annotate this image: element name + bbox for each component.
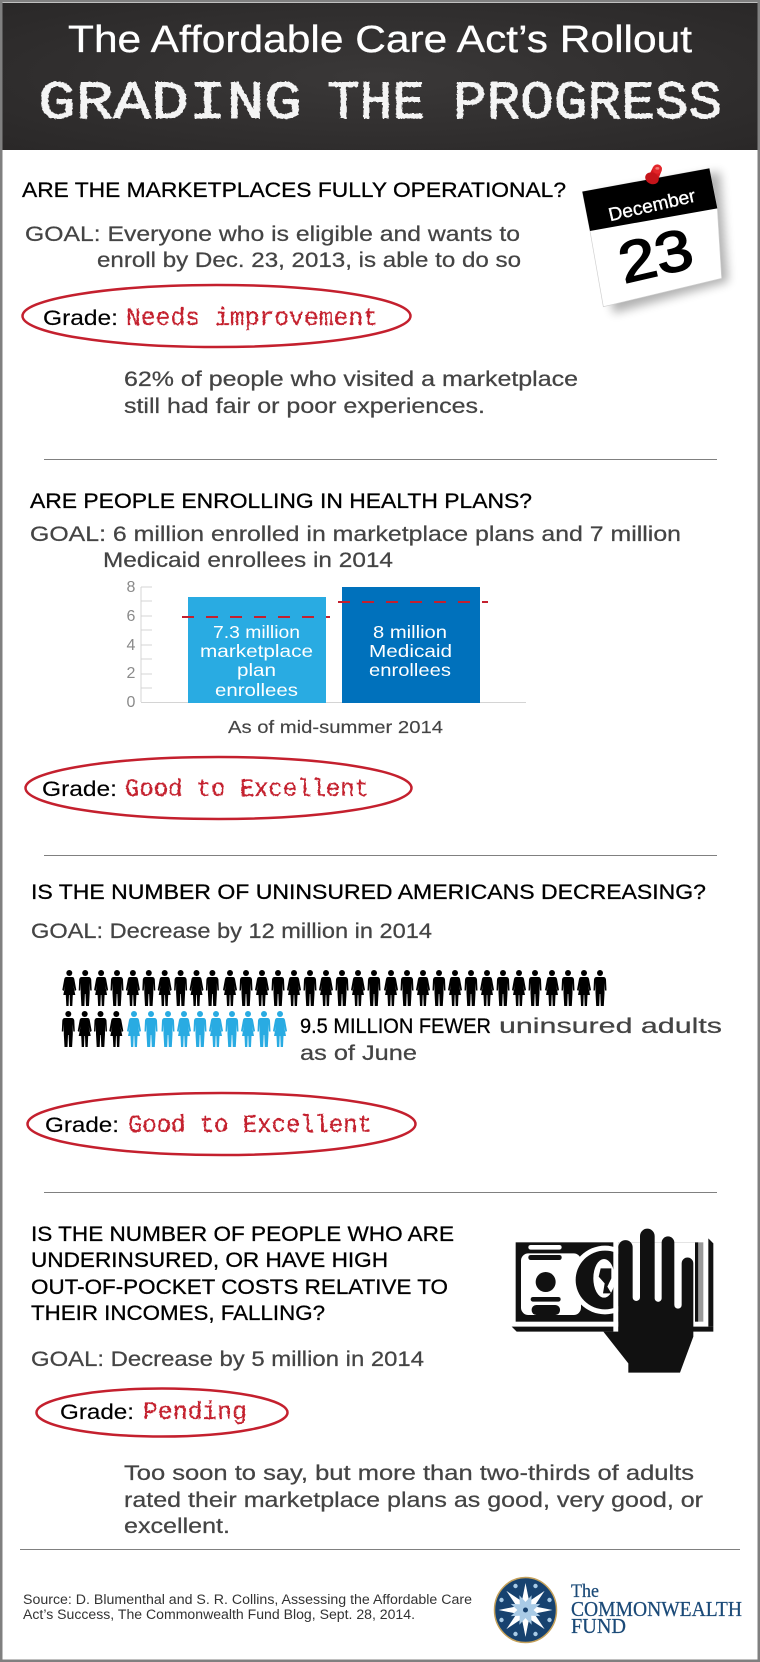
chalk subtitle: PROGRESS xyxy=(453,74,722,135)
grade oval: needs improvement: Needs improvement xyxy=(126,304,378,333)
icon: red pin xyxy=(643,164,662,186)
panel: enrolling in health plans xyxy=(26,489,681,819)
axis labels: 8 xyxy=(127,579,136,596)
heading: IS THE NUMBER OF PEOPLE WHO ARE xyxy=(31,1222,454,1246)
source note: Act’s Success, The Commonwealth Fund Blog, Sept. 28, 2014. xyxy=(23,1607,415,1622)
heading: UNDERINSURED, OR HAVE HIGH xyxy=(31,1248,388,1272)
heading xyxy=(31,1222,454,1325)
axis labels: 0 xyxy=(127,694,136,711)
grade oval: good to excellent xyxy=(28,1093,416,1155)
grade oval: pending: Pending xyxy=(143,1398,247,1427)
goal text: GOAL: Everyone who is eligible and wants to xyxy=(25,222,520,246)
bar: marketplace plan enrollees: enrollees xyxy=(215,680,298,700)
grade oval: pending xyxy=(36,1388,288,1436)
heading: ARE THE MARKETPLACES FULLY OPERATIONAL? xyxy=(22,178,566,202)
goal text: enroll by Dec. 23, 2013, is able to do so xyxy=(97,248,521,272)
panel: uninsured decreasing xyxy=(28,880,722,1155)
axis labels xyxy=(127,579,136,711)
bar chart xyxy=(127,579,526,711)
goal text xyxy=(30,522,681,572)
finding text: Too soon to say, but more than two-thirds of adults xyxy=(124,1461,694,1485)
title: The Affordable Care Act’s Rollout xyxy=(68,19,692,61)
finding text: 62% of people who visited a marketplace xyxy=(124,367,578,391)
chart caption: As of mid-summer 2014 xyxy=(228,717,443,737)
source note xyxy=(23,1592,472,1622)
heading: IS THE NUMBER OF UNINSURED AMERICANS DECREASING? xyxy=(31,880,706,904)
grade oval: needs improvement: Grade: xyxy=(43,306,118,330)
grade oval: good to excellent: Good to Excellent xyxy=(128,1111,372,1140)
logo: The Commonwealth Fund xyxy=(494,1578,742,1642)
axis labels: 6 xyxy=(127,608,136,625)
callout: 9.5 million fewer: uninsured adults xyxy=(499,1014,722,1038)
logo emblem xyxy=(494,1578,556,1642)
finding text: excellent. xyxy=(124,1514,230,1538)
grade oval: good to excellent: Grade: xyxy=(42,777,117,801)
source note: Source: D. Blumenthal and S. R. Collins, Assessing the Affordable Care xyxy=(23,1592,472,1607)
logo wordmark: FUND xyxy=(571,1614,626,1638)
heading: THEIR INCOMES, FALLING? xyxy=(31,1301,325,1325)
bar: Medicaid enrollees: 8 million xyxy=(373,622,447,642)
logo wordmark: COMMONWEALTH xyxy=(571,1597,742,1621)
callout: 9.5 million fewer: 9.5 MILLION FEWER xyxy=(300,1014,491,1038)
bar: Medicaid enrollees: enrollees xyxy=(369,660,451,680)
callout: 9.5 million fewer xyxy=(300,1014,722,1065)
goal line: 7 million xyxy=(338,601,488,603)
icon: calendar xyxy=(582,164,728,313)
grade oval: needs improvement xyxy=(22,285,410,347)
goal line: 6 million xyxy=(182,616,330,618)
grade oval: pending: Grade: xyxy=(60,1400,134,1424)
pictogram: people row two xyxy=(62,1011,287,1047)
hand xyxy=(603,1229,693,1373)
pictogram: people row one xyxy=(62,970,607,1006)
goal text xyxy=(25,222,521,272)
panel: underinsured falling xyxy=(31,1222,713,1538)
goal text: Medicaid enrollees in 2014 xyxy=(103,548,393,572)
finding text xyxy=(124,1461,703,1538)
panel: marketplaces operational xyxy=(22,164,728,418)
axis labels: 2 xyxy=(127,665,136,682)
goal text: GOAL: Decrease by 5 million in 2014 xyxy=(31,1347,424,1371)
header panel xyxy=(2,3,758,150)
goal text: GOAL: 6 million enrolled in marketplace plans and 7 million xyxy=(30,522,681,546)
grade oval: good to excellent: Grade: xyxy=(45,1113,119,1137)
bar: marketplace plan enrollees: plan xyxy=(237,660,276,680)
icon: calendar: December xyxy=(606,185,697,225)
callout: 9.5 million fewer: as of June xyxy=(300,1041,417,1065)
chalk subtitle: THE xyxy=(327,74,425,135)
bar: Medicaid enrollees: Medicaid xyxy=(369,641,452,661)
grade oval: good to excellent xyxy=(26,757,412,819)
icon: calendar: 23 xyxy=(612,217,699,296)
heading: ARE PEOPLE ENROLLING IN HEALTH PLANS? xyxy=(30,489,532,513)
goal text: GOAL: Decrease by 12 million in 2014 xyxy=(31,919,432,943)
finding text: rated their marketplace plans as good, very good, or xyxy=(124,1488,703,1512)
bar: marketplace plan enrollees xyxy=(188,597,326,703)
finding text xyxy=(124,367,578,418)
grade oval: good to excellent: Good to Excellent xyxy=(125,775,369,804)
icon: hand on money xyxy=(512,1229,713,1373)
heading: OUT-OF-POCKET COSTS RELATIVE TO xyxy=(31,1275,448,1299)
logo wordmark xyxy=(571,1581,742,1638)
bar: marketplace plan enrollees: 7.3 million xyxy=(213,622,300,642)
finding text: still had fair or poor experiences. xyxy=(124,394,485,418)
bar: marketplace plan enrollees: marketplace xyxy=(200,641,313,661)
axis labels: 4 xyxy=(127,637,136,654)
chalk subtitle: GRADING xyxy=(38,74,302,135)
chalk subtitle xyxy=(38,74,722,135)
bar: Medicaid enrollees xyxy=(342,587,480,703)
logo wordmark: The xyxy=(571,1581,599,1602)
